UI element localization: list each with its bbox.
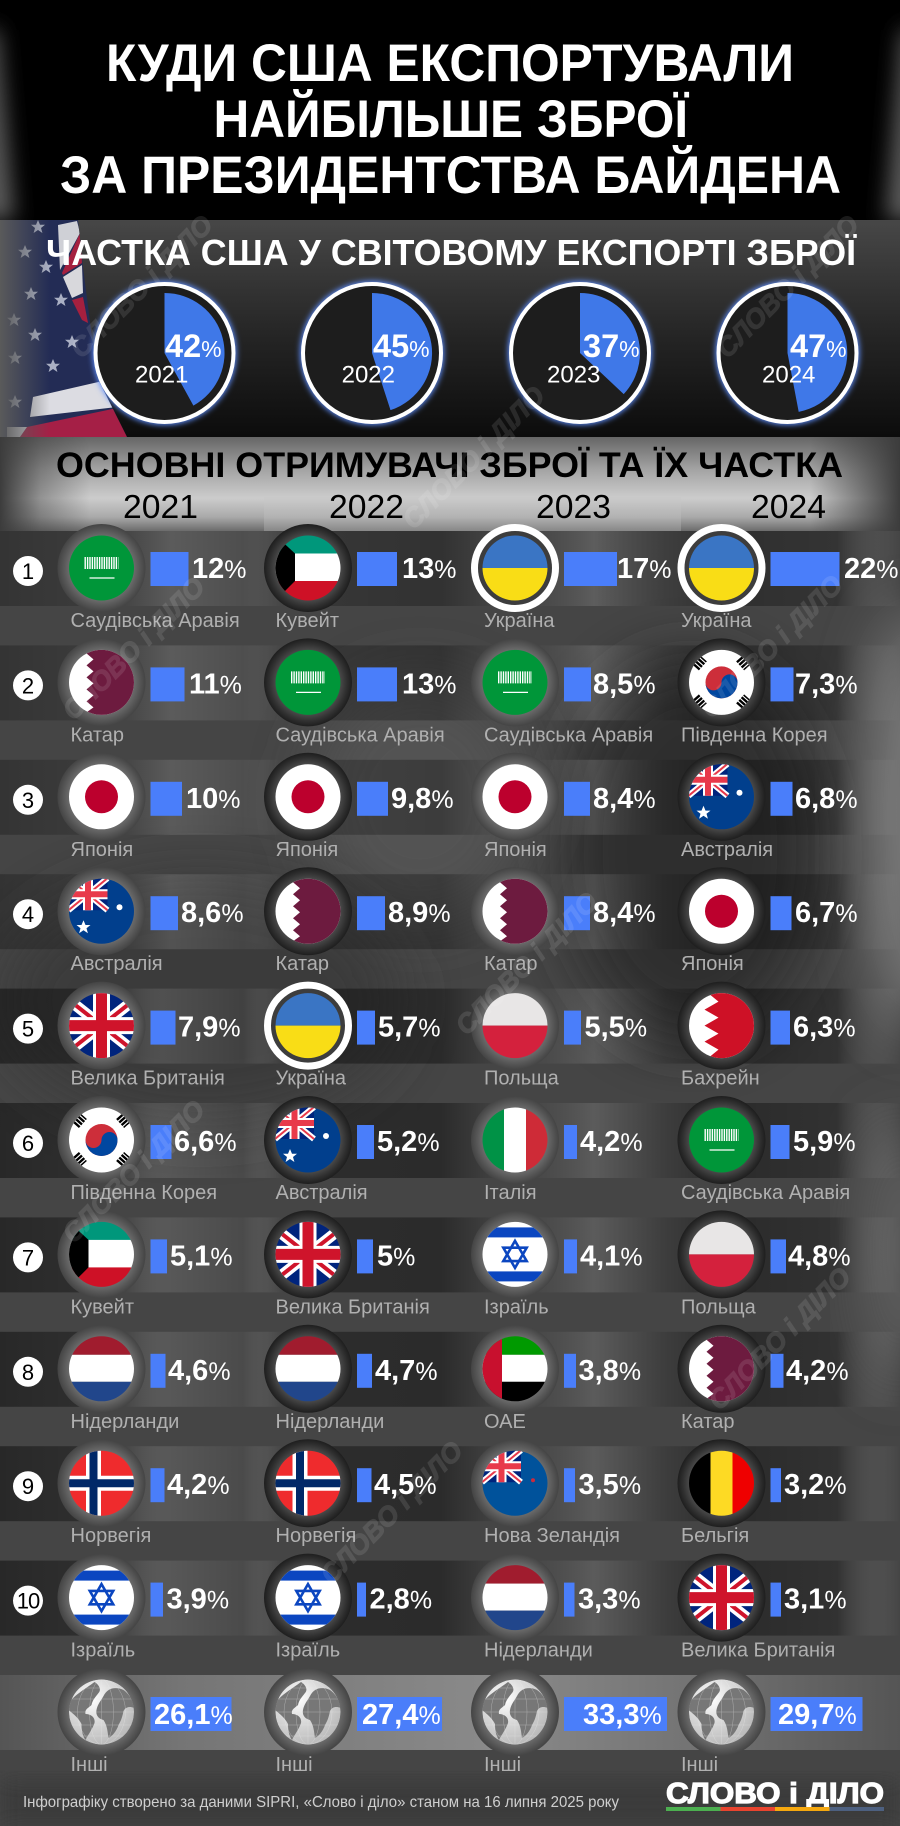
value: 4,8%: [788, 1240, 851, 1272]
rank: 6: [22, 1131, 34, 1156]
icon: globe: [471, 1668, 559, 1756]
bar: [357, 782, 388, 816]
value: 29,7%: [778, 1699, 857, 1731]
watermarks: СЛОВО і ДІЛО: [57, 1095, 211, 1249]
icon: UAE: [471, 1325, 559, 1413]
icon: Kuwait: [264, 524, 352, 612]
value: 2,8%: [370, 1584, 432, 1616]
rank: 8: [22, 1360, 34, 1385]
row 4: [0, 867, 900, 975]
pie chart: 2022: 45%: [373, 328, 430, 364]
pie chart: 2024: 47%: [790, 328, 847, 364]
year columns: 2021: [123, 488, 198, 526]
rank: 5: [22, 1017, 34, 1042]
icon: Israel: [58, 1554, 146, 1642]
country: Норвегія: [276, 1525, 356, 1547]
bar: [357, 1468, 372, 1502]
country: Кувейт: [70, 1296, 134, 1318]
value: 6,3%: [793, 1012, 856, 1044]
icon: South Korea: [58, 1096, 146, 1184]
bar: [150, 1354, 166, 1388]
bar: [564, 552, 617, 586]
bar: [770, 1011, 790, 1045]
country: Японія: [484, 839, 547, 861]
value: 3,8%: [578, 1355, 641, 1387]
value: 5,2%: [377, 1126, 440, 1158]
bar: [564, 1011, 581, 1045]
rank: [13, 1471, 43, 1501]
icon: globe: [264, 1668, 352, 1756]
watermarks: СЛОВО і ДІЛО: [65, 210, 219, 364]
row 1: [0, 524, 900, 632]
value: 8,9%: [388, 897, 451, 929]
value: 5%: [377, 1240, 415, 1272]
bar: [357, 1239, 373, 1273]
country: ОАЕ: [484, 1411, 526, 1433]
icon: Australia: [264, 1096, 352, 1184]
icon: Poland: [471, 982, 559, 1070]
icon: Saudi Arabia: [264, 638, 352, 726]
icon: Netherlands: [264, 1325, 352, 1413]
body background: [0, 531, 900, 1826]
rank: [13, 785, 43, 815]
value: 13%: [402, 553, 456, 585]
pie chart: 2023: [511, 284, 649, 422]
icon: United Kingdom: [678, 1554, 766, 1642]
country: Австралія: [70, 953, 163, 975]
value: 8,4%: [593, 783, 656, 815]
pie chart: 2021: 2021: [135, 362, 188, 388]
value: 7,9%: [178, 1012, 241, 1044]
icon: Qatar: [264, 867, 352, 955]
row: others: [0, 1668, 900, 1776]
country: Велика Британія: [70, 1068, 225, 1090]
icon: Japan: [264, 753, 352, 841]
rank: 3: [22, 788, 34, 813]
icon: Australia: [58, 867, 146, 955]
country: Саудівська Аравія: [70, 610, 240, 632]
icon: American flag: [0, 220, 130, 437]
watermarks: СЛОВО і ДІЛО: [315, 1436, 469, 1590]
pie chart: 2024: 2024: [762, 362, 815, 388]
icon: Qatar: [471, 867, 559, 955]
country: Японія: [681, 953, 744, 975]
country: Південна Корея: [681, 724, 828, 746]
row 9: [0, 1439, 900, 1547]
country: Австралія: [276, 1182, 368, 1204]
value: 10%: [186, 783, 240, 815]
pie chart: 2021: 42%: [165, 328, 222, 364]
value: 27,4%: [362, 1699, 441, 1731]
row 6: [0, 1096, 900, 1204]
watermarks: СЛОВО і ДІЛО: [711, 210, 865, 364]
icon: Qatar: [678, 1325, 766, 1413]
bar: [564, 1697, 667, 1731]
title: ЗА ПРЕЗИДЕНТСТВА БАЙДЕНА: [60, 144, 841, 205]
icon: Italy: [471, 1096, 559, 1184]
icon: United Kingdom: [264, 1210, 352, 1298]
country: Ізраїль: [70, 1640, 135, 1662]
pie chart: 2024: [718, 284, 856, 422]
icon: Israel: [471, 1210, 559, 1298]
row 2: [0, 638, 900, 746]
pie chart: 2021: [96, 284, 234, 422]
row 5: [0, 982, 900, 1090]
icon: New Zealand: [471, 1439, 559, 1527]
pie chart: 2023: 2023: [547, 362, 600, 388]
country: Італія: [484, 1182, 537, 1204]
watermarks: СЛОВО і ДІЛО: [450, 887, 604, 1041]
icon: Belgium: [678, 1439, 766, 1527]
year columns: 2024: [751, 488, 826, 526]
left edge vignette: [0, 30, 14, 220]
rank: 4: [22, 902, 34, 927]
country: Саудівська Аравія: [484, 724, 653, 746]
value: 4,1%: [580, 1240, 643, 1272]
country: Японія: [70, 839, 133, 861]
pie chart: 2022: [303, 284, 441, 422]
row 3: [0, 753, 900, 861]
icon: United Kingdom: [58, 982, 146, 1070]
value: 4,2%: [167, 1469, 230, 1501]
value: 4,7%: [375, 1355, 438, 1387]
bar: [357, 1011, 375, 1045]
country: Нідерланди: [70, 1411, 179, 1433]
pie chart: 2023: 37%: [583, 328, 640, 364]
bar: [150, 1697, 232, 1731]
watermarks: СЛОВО і ДІЛО: [703, 1262, 857, 1416]
bar: [150, 552, 188, 586]
subtitle: ЧАСТКА США У СВІТОВОМУ ЕКСПОРТІ ЗБРОЇ: [46, 232, 857, 273]
dark title background: [0, 0, 900, 220]
country: Інші: [484, 1754, 521, 1776]
value: 7,3%: [795, 668, 858, 700]
country: Південна Корея: [70, 1182, 217, 1204]
country: Катар: [70, 724, 124, 746]
value: 5,5%: [584, 1012, 647, 1044]
icon: Qatar: [58, 638, 146, 726]
bar: [770, 1125, 790, 1159]
bar: [564, 1354, 576, 1388]
country: Норвегія: [70, 1525, 151, 1547]
value: 3,9%: [166, 1584, 229, 1616]
country: Інші: [70, 1754, 108, 1776]
value: 3,2%: [784, 1469, 847, 1501]
bar: [564, 1468, 575, 1502]
watermarks: СЛОВО і ДІЛО: [397, 381, 551, 535]
bar: [357, 667, 397, 701]
country: Велика Британія: [681, 1640, 835, 1662]
bar: [770, 1697, 862, 1731]
icon: Bahrain: [678, 982, 766, 1070]
bar: [564, 1125, 577, 1159]
rank: [13, 556, 43, 586]
icon: globe: [678, 1668, 766, 1756]
icon: Poland: [678, 1210, 766, 1298]
bar: [770, 1239, 786, 1273]
value: 4,5%: [374, 1469, 437, 1501]
bar: [770, 667, 794, 701]
country: Велика Британія: [276, 1296, 430, 1318]
country: Ізраїль: [484, 1296, 549, 1318]
icon: Ukraine: [681, 528, 762, 608]
rank: 7: [22, 1245, 34, 1270]
value: 6,8%: [795, 783, 858, 815]
value: 3,3%: [578, 1584, 641, 1616]
rank: [13, 1128, 43, 1158]
bar: [150, 667, 184, 701]
icon: South Korea: [678, 638, 766, 726]
bar: [770, 1468, 781, 1502]
right edge vignette: [886, 30, 900, 220]
country: Катар: [276, 953, 329, 975]
rank: [13, 670, 43, 700]
value: 5,9%: [793, 1126, 856, 1158]
country: Нова Зеландія: [484, 1525, 620, 1547]
icon: Ukraine: [268, 985, 348, 1066]
country: Інші: [276, 1754, 313, 1776]
bar: [150, 1468, 164, 1502]
value: 3,5%: [578, 1469, 641, 1501]
bar: [770, 552, 840, 586]
panel: recipients header: [0, 437, 900, 531]
icon: Japan: [471, 753, 559, 841]
bar: [357, 1125, 374, 1159]
value: 5,1%: [170, 1240, 233, 1272]
panel: US share of world arms exports: [0, 220, 900, 437]
icon: Kuwait: [58, 1210, 146, 1298]
value: 13%: [402, 668, 456, 700]
rank: 10: [17, 1589, 40, 1614]
icon: Australia: [678, 753, 766, 841]
bar: [150, 896, 178, 930]
icon: Norway: [264, 1439, 352, 1527]
title: КУДИ США ЕКСПОРТУВАЛИ: [106, 34, 794, 93]
country: Саудівська Аравія: [276, 724, 445, 746]
value: 9,8%: [391, 783, 454, 815]
watermarks: [57, 210, 865, 1590]
bar: [357, 552, 397, 586]
country: Австралія: [681, 839, 773, 861]
watermarks: СЛОВО і ДІЛО: [695, 570, 849, 724]
bar: [150, 1583, 163, 1617]
bar: [564, 1583, 574, 1617]
bar: [357, 896, 385, 930]
year columns: 2023: [536, 488, 611, 526]
bar: [770, 782, 792, 816]
rank: 9: [22, 1474, 34, 1499]
value: 22%: [844, 553, 898, 585]
icon: Saudi Arabia: [471, 638, 559, 726]
bar: [150, 782, 182, 816]
bar: [150, 1011, 176, 1045]
title: [60, 34, 841, 205]
bar: [564, 896, 590, 930]
value: 6,7%: [795, 897, 858, 929]
country: Інші: [681, 1754, 718, 1776]
watermarks: СЛОВО і ДІЛО: [57, 572, 211, 726]
country: Україна: [276, 1068, 347, 1090]
country: Україна: [681, 610, 752, 632]
icon: Netherlands: [471, 1554, 559, 1642]
icon: Japan: [58, 753, 146, 841]
bar: [357, 1583, 366, 1617]
year columns: 2022: [329, 488, 404, 526]
rank: [13, 1357, 43, 1387]
value: 4,6%: [168, 1355, 231, 1387]
icon: globe: [58, 1668, 146, 1756]
country: Катар: [484, 953, 538, 975]
country: Польща: [681, 1296, 757, 1318]
country: Бахрейн: [681, 1068, 760, 1090]
value: 12%: [192, 553, 246, 585]
bar: [150, 1125, 172, 1159]
value: 26,1%: [154, 1699, 233, 1731]
rank: [13, 1242, 43, 1272]
value: 4,2%: [580, 1126, 643, 1158]
rank: 1: [22, 559, 34, 584]
bar: [770, 1583, 781, 1617]
country: Саудівська Аравія: [681, 1182, 850, 1204]
rank: [13, 1014, 43, 1044]
value: 8,4%: [593, 897, 656, 929]
value: 4,2%: [786, 1355, 849, 1387]
icon: Japan: [678, 867, 766, 955]
rank: [13, 899, 43, 929]
row 8: [0, 1325, 900, 1433]
title: НАЙБІЛЬШЕ ЗБРОЇ: [214, 88, 689, 149]
heading: ОСНОВНІ ОТРИМУВАЧІ ЗБРОЇ ТА ЇХ ЧАСТКА: [56, 446, 843, 485]
pie chart: 2022: 2022: [342, 362, 395, 388]
value: 11%: [189, 668, 242, 700]
logo: СЛОВО і ДІЛО: [666, 1778, 884, 1810]
country: Нідерланди: [276, 1411, 384, 1433]
bar: [357, 1354, 372, 1388]
source note: Інфографіку створено за даними SIPRI, «Слово і діло» станом на 16 липня 2025 року: [23, 1794, 619, 1811]
country: Бельгія: [681, 1525, 749, 1547]
bar: [150, 1239, 167, 1273]
value: 6,6%: [174, 1126, 237, 1158]
bar: [770, 1354, 784, 1388]
country: Катар: [681, 1411, 735, 1433]
value: 5,7%: [378, 1012, 441, 1044]
icon: Saudi Arabia: [678, 1096, 766, 1184]
bar: [564, 1239, 577, 1273]
value: 33,3%: [583, 1699, 662, 1731]
rank: [13, 1586, 43, 1616]
country: Кувейт: [276, 610, 339, 632]
country: Нідерланди: [484, 1640, 593, 1662]
icon: Netherlands: [58, 1325, 146, 1413]
value: 3,1%: [784, 1584, 847, 1616]
country: Японія: [276, 839, 338, 861]
country: Україна: [484, 610, 555, 632]
bar: [564, 667, 591, 701]
icon: Ukraine: [474, 528, 556, 608]
icon: Saudi Arabia: [58, 524, 146, 612]
value: 8,6%: [181, 897, 244, 929]
icon: Norway: [58, 1439, 146, 1527]
year columns: [123, 488, 826, 526]
bar: [770, 896, 792, 930]
row 10: [0, 1554, 900, 1662]
value: 17%: [617, 553, 672, 585]
bar: [357, 1697, 442, 1731]
icon: Israel: [264, 1554, 352, 1642]
rank: 2: [22, 673, 34, 698]
row 7: [0, 1210, 900, 1318]
value: 8,5%: [593, 668, 656, 700]
bar: [564, 782, 590, 816]
country: Ізраїль: [276, 1640, 340, 1662]
country: Польща: [484, 1068, 560, 1090]
